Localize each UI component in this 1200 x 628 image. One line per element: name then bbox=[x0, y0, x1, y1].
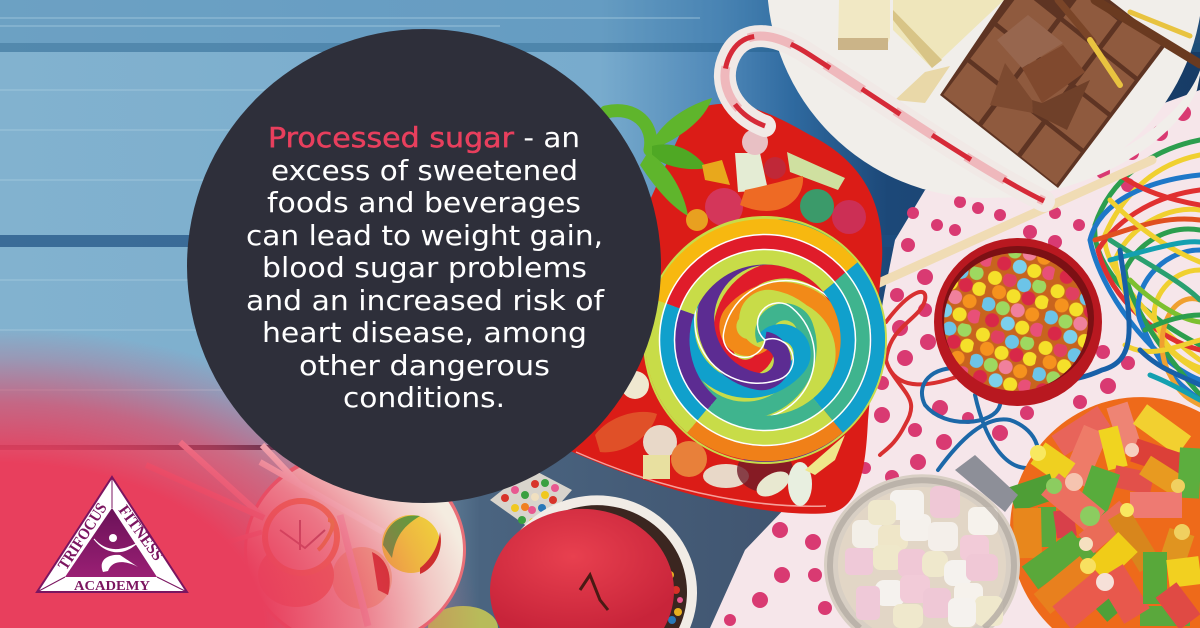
big rainbow lollipop bbox=[644, 216, 887, 464]
sprinkles bowl bbox=[934, 238, 1102, 406]
body text: heart disease, among bbox=[262, 316, 587, 349]
body text: foods and beverages bbox=[267, 186, 581, 219]
red ice cream scoop bbox=[490, 509, 674, 628]
body text: other dangerous bbox=[299, 349, 550, 382]
plate of chocolate bbox=[767, 0, 1200, 198]
rainbow liquorice laces bbox=[1020, 140, 1200, 405]
logo lettering: FITNESS bbox=[115, 502, 166, 564]
tablecloth with polka dots bbox=[710, 90, 1200, 628]
green leaf handle bbox=[606, 98, 712, 216]
orange bowl of liquorice tubes bbox=[1010, 397, 1200, 628]
body text: and an increased risk of bbox=[246, 284, 605, 317]
plate of lollipops bbox=[146, 442, 466, 628]
body text: excess of sweetened bbox=[271, 154, 578, 187]
logo lettering: TRIFOCUS bbox=[55, 500, 111, 573]
body text: conditions. bbox=[343, 381, 505, 414]
ice cream bowl bbox=[490, 495, 697, 628]
lollipop stick bbox=[870, 160, 1152, 287]
candy cane bbox=[725, 36, 1044, 201]
red heart-shaped dish bbox=[568, 98, 882, 514]
green spoon bbox=[428, 606, 498, 628]
boiled candies in dish bbox=[595, 129, 866, 506]
marshmallow jar bbox=[824, 455, 1020, 628]
logo figure bbox=[94, 534, 138, 572]
text circle panel bbox=[187, 29, 661, 503]
chocolate pretzel sticks bbox=[1058, 0, 1200, 85]
logo lettering: ACADEMY bbox=[74, 579, 150, 594]
red liquorice and blue lace on cloth bbox=[880, 292, 1038, 470]
body text: - an bbox=[514, 121, 580, 154]
milk chocolate bar bbox=[940, 0, 1167, 188]
logo lettering bbox=[55, 500, 166, 594]
body text: Processed sugar bbox=[268, 121, 515, 154]
body text: blood sugar problems bbox=[262, 251, 587, 284]
red gradient overlay bbox=[0, 328, 480, 628]
white chocolate pieces bbox=[838, 0, 1004, 103]
small jar of beads bbox=[490, 468, 572, 532]
body text: can lead to weight gain, bbox=[246, 219, 603, 252]
logo: Trifocus Fitness Academy bbox=[37, 477, 187, 594]
